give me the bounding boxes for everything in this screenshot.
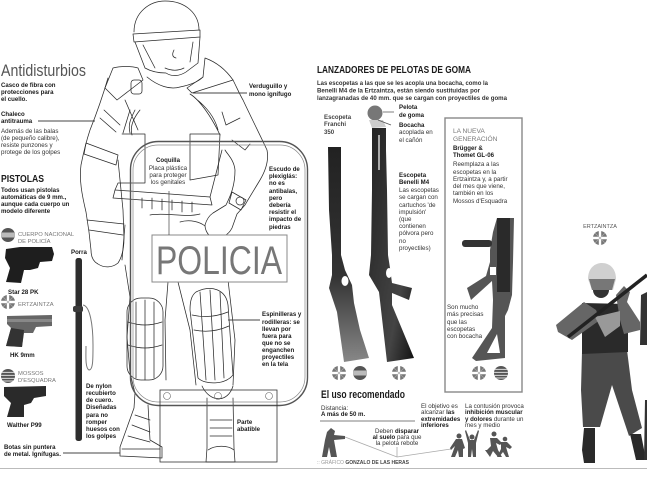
- left boot: [120, 393, 162, 458]
- text: precisas: escopetas: [447, 326, 475, 333]
- text: brugger: Reemplaza a las: [453, 161, 499, 168]
- icon: crowd silhouettes: [450, 430, 512, 457]
- text: disparar: [373, 428, 422, 447]
- text: baton note: romper: [86, 419, 108, 426]
- text: lanzadores intro: [317, 80, 508, 102]
- text: benelli: (que: [399, 216, 412, 223]
- text: escudo: impacto de: [269, 216, 302, 223]
- left knee pad: [127, 298, 163, 380]
- text: benelli: contienen: [399, 223, 426, 230]
- text: pelota: Pelota: [399, 104, 418, 111]
- text: bocacha: Bocacha: [399, 122, 425, 129]
- text: helmet note: protecciones para: [1, 89, 54, 96]
- icon: pistol star: [5, 247, 54, 283]
- text: escudo: no es: [269, 180, 286, 187]
- text: vest note: resiste punzones y: [1, 142, 53, 149]
- text: baton note: De nylon: [86, 383, 112, 390]
- arm right: [616, 286, 640, 334]
- text: parte abatible: abatible: [237, 426, 261, 433]
- text: baton note: los golpes: [86, 433, 117, 440]
- text: contusion: La contusión provoca: [465, 403, 524, 410]
- text: pistols intro: [1, 187, 70, 215]
- text: contusion: [465, 403, 524, 429]
- text: disparar: la pelota rebote: [376, 440, 419, 447]
- heading: nueva generacion: GENERACIÓN: [453, 134, 498, 143]
- text: bocacha: [399, 122, 433, 144]
- icon: flag ertzaintza photo: [593, 231, 607, 245]
- text: objetivo: inferiores: [421, 422, 449, 429]
- panel: nueva generacion: [445, 118, 522, 392]
- text: verduguillo: Verduguillo y: [249, 83, 288, 90]
- text: vest note: Además de las balas: [1, 128, 58, 135]
- label: ertzaintza photo: ERTZAINTZA: [583, 224, 617, 230]
- text: precisas: con bocacha: [447, 333, 483, 340]
- text: precisas: más precisas: [447, 311, 483, 318]
- flags in panel: [472, 366, 508, 380]
- text: brugger: escopetas en la: [453, 169, 497, 176]
- text: espinilleras: fuera para: [262, 333, 292, 340]
- legs: [581, 350, 642, 436]
- text: contusion: y dolores durante un: [465, 416, 524, 423]
- text: helmet note: Casco de fibra con: [1, 82, 56, 89]
- text: boots note: [4, 444, 120, 458]
- text: espinilleras: en la tela: [262, 361, 289, 368]
- text: precisas: [447, 304, 483, 340]
- text: lanzadores intro: Benelli M4 de la Ertzaintza, están siendo sustituidas por: [317, 88, 481, 94]
- text: coquilla: Placa plástica: [149, 165, 188, 172]
- flags under shotguns: [332, 366, 406, 380]
- text: benelli: se cargan con: [399, 194, 438, 201]
- text: benelli: cartuchos 'de: [399, 202, 436, 209]
- text: espinilleras: proyectiles: [262, 354, 295, 361]
- text: baton note: de cuero.: [86, 397, 113, 404]
- shoulder pads and vest: [105, 58, 233, 226]
- helmet: [588, 263, 616, 290]
- label: walther: Walther P99: [7, 422, 42, 429]
- text: espinilleras: rodilleras: se: [262, 319, 301, 326]
- text: brugger: Ertzaintza y, a partir: [453, 176, 508, 183]
- text: baton note: [86, 383, 120, 440]
- text: vest note: antitrauma: [1, 118, 33, 125]
- heading: nueva generacion: LA NUEVA: [453, 128, 485, 135]
- text: escudo: debería: [269, 202, 291, 209]
- text: brugger: Mossos d'Esquadra: [453, 198, 508, 205]
- helmet: [133, 1, 200, 76]
- text: baton note: Diseñadas: [86, 404, 117, 411]
- text: benelli: impulsión': [399, 209, 426, 216]
- text: baton note: huesos con: [86, 426, 120, 433]
- text: benelli: [399, 172, 439, 252]
- text: vest note: (de pequeño calibre),: [1, 135, 60, 142]
- shield plate POLICIA: POLICIA: [156, 239, 282, 283]
- label: franchi: Franchi: [324, 121, 346, 128]
- text: benelli: pólvora pero: [399, 230, 434, 237]
- label: cuerpo nacional: [18, 232, 75, 245]
- text: distancia: [320, 405, 415, 421]
- text: espinilleras: que no se: [262, 340, 291, 347]
- text: pelota: [399, 104, 425, 119]
- text: pelota: de goma: [399, 112, 425, 119]
- label: cuerpo nacional: DE POLICÍA: [18, 238, 51, 245]
- text: bocacha: el cañón: [399, 137, 423, 144]
- text: disparar: Deben disparar: [375, 428, 420, 435]
- label: porra: Porra: [71, 249, 88, 256]
- text: lanzadores intro: Las escopetas a las que se les acopla una bocacha, como la: [317, 80, 489, 87]
- text: pistols intro: automáticas de 9 mm.,: [1, 194, 67, 201]
- text: objetivo: [421, 403, 461, 429]
- heading: lanzadores: LANZADORES DE PELOTAS DE GOMA: [317, 64, 471, 76]
- text: pistols intro: modelo diferente: [1, 208, 51, 215]
- fold-down flap: [160, 390, 277, 462]
- shotgun franchi: [328, 147, 369, 362]
- divider bottom: [0, 468, 647, 470]
- text: espinilleras: enganchen: [262, 347, 294, 354]
- baton: [73, 258, 93, 441]
- text: coquilla: [149, 157, 188, 235]
- text: brugger: Brügger &: [453, 145, 483, 152]
- text: coquilla: para proteger: [149, 172, 187, 179]
- heading: el uso recomendado: El uso recomendado: [321, 389, 405, 401]
- text: escudo: antibalas,: [269, 188, 297, 195]
- label: ertzaintza: ERTZAINTZA: [18, 302, 54, 308]
- left arm: [80, 78, 125, 267]
- text: escudo: piedras: [269, 224, 291, 231]
- text: objetivo: extremidades: [421, 416, 461, 423]
- text: contusion: mes y medio: [465, 422, 501, 429]
- second officer: [640, 292, 647, 460]
- heading: pistolas: PISTOLAS: [1, 174, 44, 185]
- label: hk: HK 9mm: [10, 352, 35, 359]
- text: benelli: proyectiles): [399, 245, 431, 252]
- text: escudo: [269, 166, 302, 231]
- text: escudo: pero: [269, 195, 282, 202]
- vest: [595, 311, 620, 337]
- text: bocacha: acoplada en: [399, 129, 433, 136]
- rubber ball and muzzle: [368, 106, 394, 128]
- text: escudo: Escudo de: [269, 166, 300, 173]
- text: benelli: no: [399, 238, 406, 245]
- label: star: Star 28 PK: [8, 289, 39, 296]
- heading: nueva generacion: [453, 128, 498, 143]
- shotgun benelli: [369, 128, 414, 362]
- text: parte abatible: Parte: [237, 419, 253, 426]
- label: franchi: Escopeta: [324, 114, 352, 121]
- arm left: [556, 302, 600, 340]
- riot officer photo: [556, 263, 647, 463]
- icon: shooter silhouette: [322, 428, 345, 457]
- text: coquilla: los genitales: [151, 179, 185, 186]
- text: precisas: que las: [447, 319, 467, 326]
- text: espinilleras: llevan por: [262, 326, 291, 333]
- text: escudo: plexiglás:: [269, 173, 297, 180]
- riot officer line drawing: [80, 1, 268, 462]
- text: precisas: Son mucho: [447, 304, 479, 311]
- text: escudo: resistir el: [269, 209, 296, 216]
- text: vest note: [1, 111, 95, 156]
- text: boots note: Botas sin puntera: [4, 444, 56, 451]
- text: espinilleras: [228, 311, 302, 368]
- text: espinilleras: Espinilleras y: [262, 311, 302, 318]
- text: verduguillo: [193, 83, 292, 98]
- text: brugger: [453, 145, 508, 205]
- text: benelli: Las escopetas: [399, 187, 439, 194]
- text: brugger: también en los: [453, 190, 493, 197]
- text: boots note: de metal. Ignífugas.: [4, 451, 61, 458]
- text: pistols intro: Todos usan pistolas: [1, 187, 60, 194]
- text: vest note: protege de los golpes: [1, 149, 60, 156]
- text: helmet note: [1, 82, 56, 103]
- text: distancia: Distancia:: [321, 405, 348, 412]
- text: benelli: Escopeta: [399, 172, 427, 179]
- boots: [582, 428, 646, 463]
- text: objetivo: alcanzar las: [421, 409, 455, 416]
- label: mossos: D'ESQUADRA: [18, 378, 56, 384]
- text: disparar: al suelo para que: [373, 434, 422, 441]
- text: baton note: recubierto: [86, 390, 116, 397]
- text: brugger: del mes que viene,: [453, 183, 505, 190]
- label: mossos: MOSSOS: [18, 371, 44, 377]
- text: coquilla: Coquilla: [156, 157, 181, 164]
- text: objetivo: El objetivo es: [421, 403, 458, 410]
- label: cuerpo nacional: CUERPO NACIONAL: [18, 232, 75, 238]
- torso-legs: [125, 265, 235, 393]
- text: helmet note: el cuello.: [1, 96, 27, 103]
- label: franchi: 350: [324, 129, 335, 136]
- icon: pistol walther: [4, 386, 46, 417]
- icon: flag mossos: [1, 369, 15, 383]
- text: lanzadores intro: lanzagranadas de 40 mm. que se cargan con proyectiles de goma: [317, 95, 508, 102]
- right knee pad: [190, 288, 233, 383]
- icon: flag policia nacional: [1, 228, 15, 242]
- shield: [130, 142, 308, 462]
- text: parte abatible: [237, 419, 261, 433]
- text: baton note: para no: [86, 412, 108, 419]
- icon: pistol hk: [6, 315, 52, 347]
- icon: flag ertzaintza: [1, 295, 15, 309]
- text: distancia: A más de 50 m.: [321, 411, 365, 418]
- right boot: [202, 386, 235, 462]
- text: benelli: Benelli M4: [399, 179, 430, 186]
- right arm and hand: [205, 80, 268, 238]
- launcher gl-06: [462, 218, 514, 361]
- text: verduguillo: mono ignífugo: [249, 91, 292, 98]
- text: pistols intro: aunque cada cuerpo un: [1, 201, 70, 208]
- launcher barrel: [568, 275, 647, 337]
- label: mossos: [18, 371, 56, 384]
- torso: [582, 303, 628, 354]
- head: [593, 282, 609, 298]
- credit: :: GRÁFICO GONZALO DE LAS HERAS: [317, 459, 410, 466]
- diagram lines: [345, 437, 451, 457]
- label: franchi: [324, 114, 352, 136]
- text: vest note: Chaleco: [1, 111, 25, 118]
- text: contusion: inhibición muscular: [465, 409, 523, 416]
- text: brugger: Thomet GL-06: [453, 152, 495, 159]
- title: Antidisturbios: [1, 61, 86, 80]
